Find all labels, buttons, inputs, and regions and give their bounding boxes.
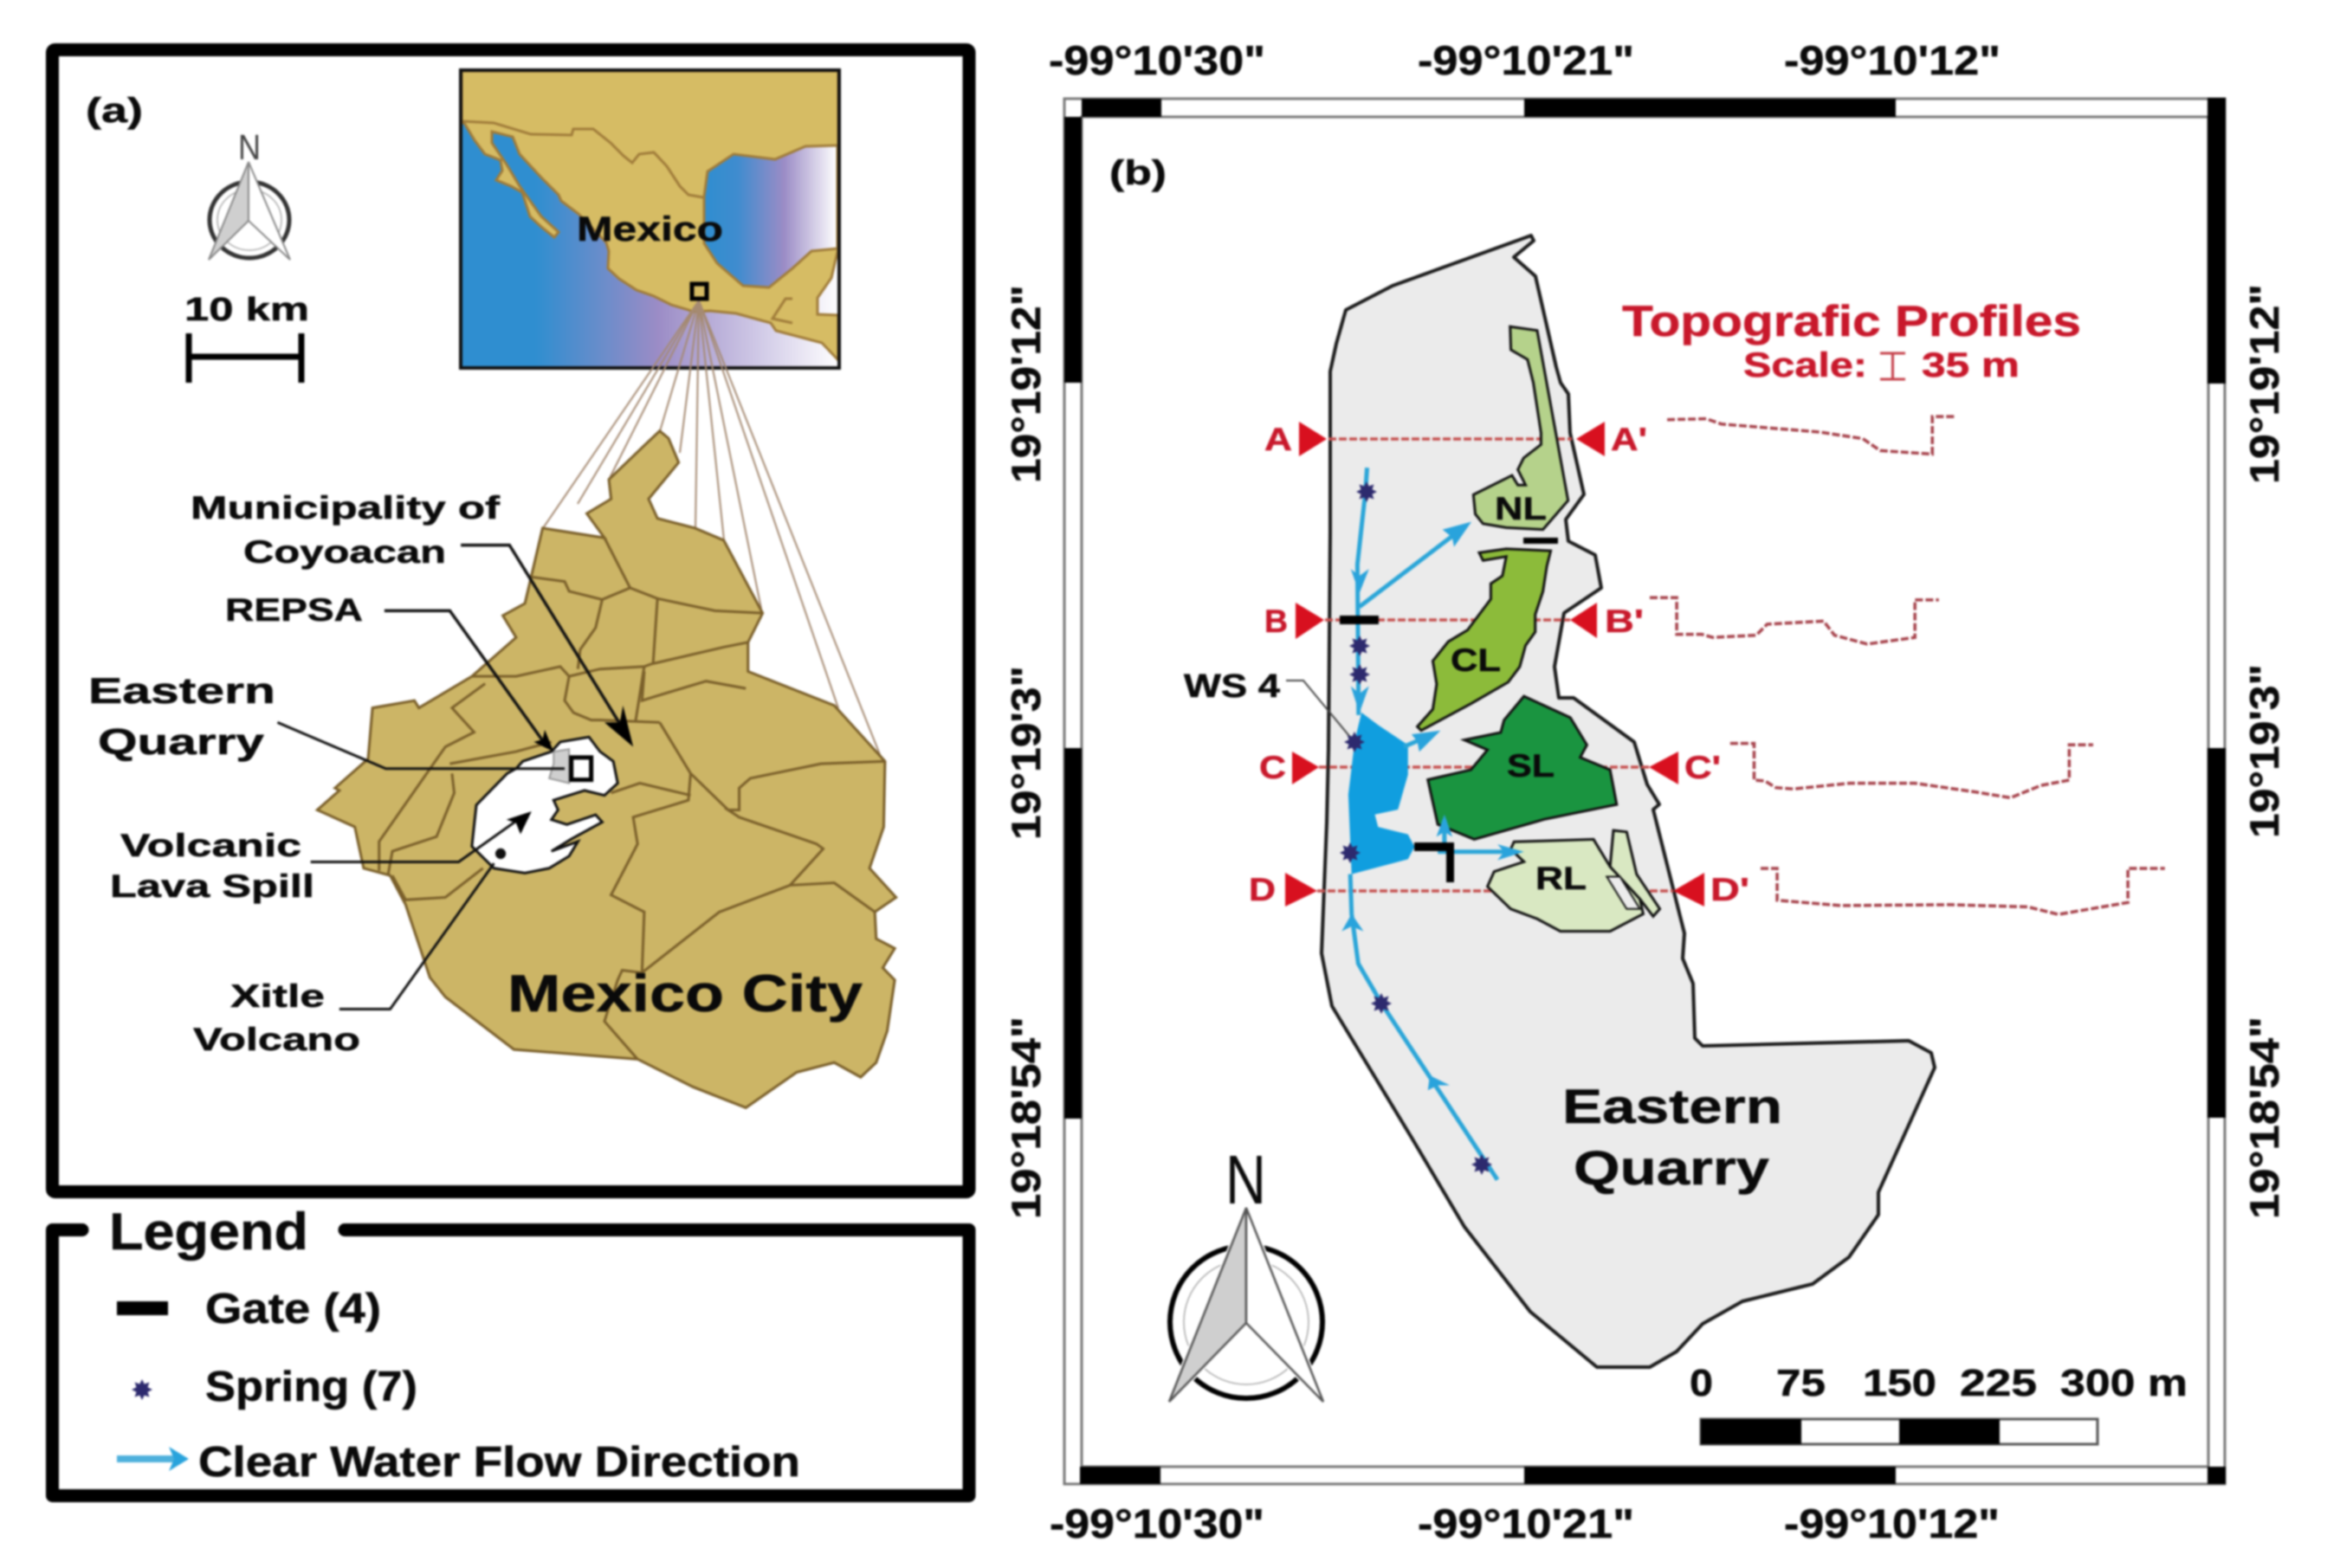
right latitude labels (2241, 284, 2287, 1219)
bottom longitude labels: -99°10'12" (1784, 1500, 2000, 1546)
scale bar labels: 150 (1863, 1362, 1936, 1404)
top longitude labels: -99°10'12" (1784, 37, 2001, 83)
label WS 4 with leader (1184, 668, 1349, 736)
marker D: D (1249, 872, 1276, 907)
label Municipality of Coyoacan (191, 490, 501, 570)
legend: gate label: Gate (4) (205, 1286, 381, 1332)
marker D (1249, 872, 1317, 907)
inset locator box (692, 284, 707, 299)
bottom longitude labels (1050, 1500, 2000, 1546)
marker A' (1576, 422, 1647, 457)
label Eastern Quarry: Eastern (1562, 1079, 1782, 1133)
legend: spring label: Spring (7) (205, 1364, 417, 1410)
marker C: C (1259, 750, 1286, 785)
quarry outline (1322, 236, 1935, 1367)
top longitude labels (1049, 37, 2001, 83)
panel label (b): (b) (1109, 154, 1167, 192)
scale bar labels: 225 (1960, 1362, 2037, 1404)
marker C (1259, 750, 1319, 785)
icon: large north arrow: N (1225, 1141, 1266, 1218)
marker C' (1649, 750, 1721, 785)
section lines A to D (1317, 439, 1673, 891)
marker C': C' (1684, 750, 1721, 785)
gates (1340, 538, 1558, 882)
north lake NL (1473, 326, 1568, 530)
panel: (a) location map (52, 50, 969, 1191)
right latitude labels: 19°18'54" (2241, 1016, 2287, 1219)
left latitude labels: 19°19'12" (1003, 285, 1049, 483)
topographic profiles A to D (1650, 416, 2165, 914)
icon: small north arrow: N (238, 127, 261, 167)
label Mexico City: Mexico City (507, 965, 863, 1023)
label Municipality of Coyoacan: Coyoacan (243, 534, 446, 570)
icon: large north arrow (1169, 1141, 1323, 1402)
top longitude labels: -99°10'30" (1049, 37, 1265, 83)
springs (1340, 481, 1492, 1175)
scale bar labels: 300 m (2060, 1362, 2188, 1404)
marker D' (1673, 872, 1749, 907)
label Volcanic Lava Spill (110, 828, 314, 904)
connector lines from Mexico inset to city (543, 300, 882, 761)
inset map: Mexico (459, 68, 841, 369)
profile scale: 35 m (1922, 346, 2020, 384)
profile scale (1743, 346, 2020, 384)
north lake NL: NL (1495, 491, 1547, 526)
marker B' (1570, 603, 1644, 639)
left latitude labels: 19°19'3" (1003, 666, 1049, 840)
legend: spring symbol (132, 1379, 152, 1400)
label Xitle Volcano: Xitle (230, 978, 325, 1014)
marker A (1264, 422, 1327, 457)
label Eastern Quarry: Eastern (88, 670, 275, 711)
label Municipality of Coyoacan: Municipality of (191, 490, 501, 526)
bottom longitude labels: -99°10'21" (1418, 1500, 1634, 1546)
marker D': D' (1710, 872, 1749, 907)
marker A: A (1264, 422, 1292, 457)
central lake CL: CL (1451, 642, 1501, 678)
section markers (1249, 422, 1749, 907)
clear water body (1348, 713, 1414, 874)
scale bar labels (1690, 1362, 2188, 1404)
legend heading: Legend (109, 1203, 308, 1261)
label Xitle Volcano (193, 978, 360, 1057)
inset map: Mexico: Mexico (577, 210, 723, 248)
scale bar 10 km (189, 333, 301, 383)
panel label (a): (a) (86, 92, 143, 130)
panel: legend (52, 1203, 969, 1496)
right latitude labels: 19°19'3" (2241, 664, 2287, 838)
legend: gate symbol (117, 1301, 168, 1315)
remnant lake RL (1488, 830, 1660, 932)
icon: small north arrow (209, 127, 290, 260)
label Eastern Quarry: Quarry (1574, 1140, 1769, 1195)
graticule frame (1064, 98, 2226, 1484)
scale label 10 km: 10 km (184, 292, 309, 328)
label Eastern Quarry (1562, 1079, 1782, 1195)
legend: flow arrow (117, 1447, 189, 1471)
water flow arrows north (1351, 468, 1471, 752)
label REPSA: REPSA (225, 592, 363, 628)
marker B: B (1264, 603, 1288, 639)
map: Mexico City boroughs (317, 431, 896, 1107)
leader lines and arrows (277, 545, 633, 1010)
top longitude labels: -99°10'21" (1418, 37, 1634, 83)
marker B': B' (1605, 603, 1644, 639)
panel: (b) Eastern Quarry map (1003, 37, 2287, 1546)
south lake SL (1428, 696, 1617, 839)
right latitude labels: 19°19'12" (2241, 284, 2287, 484)
scale bar 0-300 m (1701, 1419, 2098, 1444)
left latitude labels (1003, 285, 1049, 1219)
bottom longitude labels: -99°10'30" (1050, 1500, 1264, 1546)
label Eastern Quarry: Quarry (98, 721, 265, 762)
water flow arrows south (1341, 815, 1524, 1180)
legend: flow label: Clear Water Flow Direction (198, 1439, 800, 1486)
label WS 4 with leader: WS 4 (1184, 668, 1280, 705)
left latitude labels: 19°18'54" (1003, 1016, 1049, 1219)
scale bar labels: 0 (1690, 1362, 1713, 1404)
profile scale: Scale: (1743, 346, 1867, 384)
central lake CL (1418, 549, 1551, 731)
marker B (1264, 603, 1324, 639)
scale bar labels: 75 (1776, 1362, 1826, 1404)
label Eastern Quarry (88, 670, 275, 762)
remnant lake RL: RL (1535, 861, 1587, 896)
label Xitle Volcano: Volcano (193, 1022, 360, 1057)
label Volcanic Lava Spill: Lava Spill (110, 868, 314, 904)
label Volcanic Lava Spill: Volcanic (120, 828, 301, 863)
volcanic lava spill area (472, 737, 617, 873)
heading: Topografic Profiles: Topografic Profiles (1622, 297, 2081, 345)
marker A': A' (1611, 422, 1647, 457)
south lake SL: SL (1507, 748, 1555, 784)
